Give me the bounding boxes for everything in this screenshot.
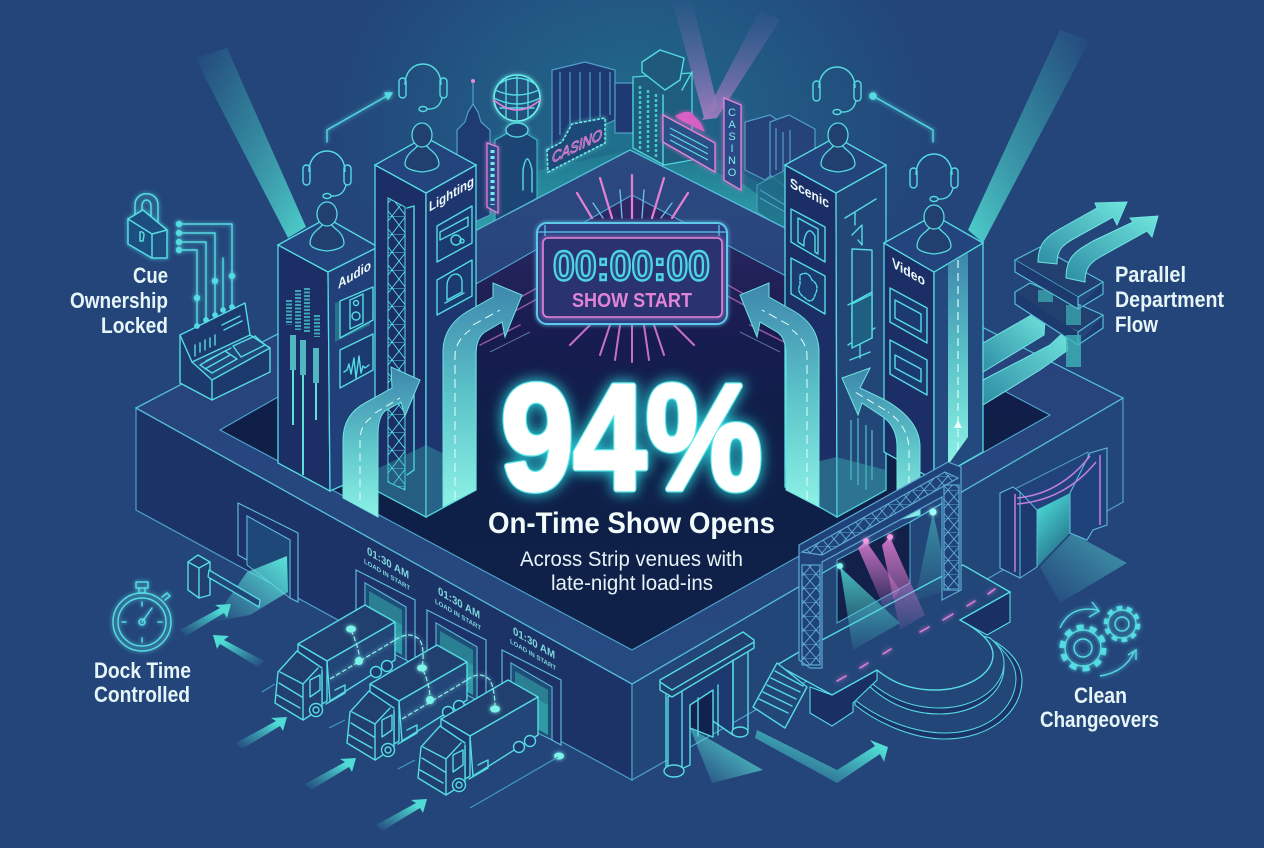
truck 1	[275, 605, 395, 720]
upright posts	[1038, 290, 1081, 367]
truck data links	[330, 626, 564, 760]
spotlight beams: pink	[672, 0, 780, 120]
dock time label 2: 01:30 AM	[438, 584, 480, 622]
vertical casino sign right: O	[728, 167, 737, 179]
vertical casino sign right: N	[728, 155, 736, 167]
description line 1: Across Strip venues with	[520, 548, 743, 571]
icon: set frame	[791, 209, 825, 262]
vertical sign left	[487, 143, 498, 213]
headline stat: 94%	[501, 353, 762, 521]
stage deck	[777, 565, 1010, 695]
light beam: cyan	[840, 567, 900, 650]
vertical casino sign right: A	[728, 119, 736, 131]
stage tier 1 top	[868, 630, 1004, 708]
stage lamps	[837, 508, 936, 569]
lower plate	[1015, 283, 1103, 345]
floor arrow 4	[305, 758, 356, 790]
label: dock time controlled	[94, 658, 191, 707]
dock time label 3: 01:30 AM	[513, 624, 555, 662]
arch wall inner	[1020, 492, 1037, 578]
icon: moving head	[437, 260, 472, 315]
floor guide lines	[262, 684, 558, 808]
label: clean changeovers	[1040, 683, 1159, 732]
central pit	[220, 195, 1050, 650]
label: cue ownership locked	[70, 263, 168, 338]
marquee sign	[663, 112, 715, 172]
arch left column	[1000, 487, 1020, 578]
person: video lead	[917, 205, 951, 254]
label: Video: Video	[892, 255, 925, 290]
dock time label 3: LOAD IN START	[510, 638, 557, 673]
subtitle: On-Time Show Opens	[488, 507, 775, 540]
dock time label 2: LOAD IN START	[435, 598, 482, 633]
flow arrow: big left	[443, 283, 522, 507]
show start label: SHOW START	[572, 290, 692, 312]
vertical casino sign right: C	[728, 107, 736, 119]
icon: speaker	[335, 287, 373, 342]
floor arrow 3	[236, 717, 287, 749]
connector: right headsets	[870, 93, 933, 142]
light beams: pink	[858, 537, 925, 630]
teal hotel	[633, 50, 692, 168]
platform	[136, 150, 1123, 780]
dock door 2	[427, 610, 486, 705]
skyline	[457, 50, 815, 280]
label: cue ownership locked: Ownership	[70, 288, 168, 313]
tower: video	[884, 205, 983, 480]
countdown digits: 00:00:00	[553, 242, 710, 289]
vertical casino sign right: I	[730, 143, 734, 155]
equaliser bars	[289, 288, 317, 337]
icon: lighting rig	[437, 206, 472, 262]
glass base	[375, 445, 476, 517]
arch opening	[1037, 493, 1070, 567]
label: Audio: Audio	[338, 257, 371, 293]
icon: gears	[1060, 602, 1138, 676]
label: clean changeovers: Clean	[1074, 683, 1127, 708]
person: scenic lead	[821, 123, 855, 172]
description line 2: late-night load-ins	[551, 572, 713, 595]
icon: scenic gear	[791, 258, 825, 314]
timer burst	[570, 175, 694, 362]
person: lighting lead	[405, 123, 439, 172]
rigging	[845, 199, 876, 360]
faders	[290, 335, 319, 475]
headline stat glow: 94%	[501, 353, 762, 521]
arch right column	[1070, 448, 1107, 540]
flow arrow: small left	[343, 367, 420, 517]
teal base lines	[477, 150, 630, 235]
icon: waveform	[340, 334, 373, 388]
right wall	[632, 398, 1123, 780]
upper flow arrow B	[1066, 216, 1158, 282]
headset icon 2	[399, 64, 447, 112]
video light strip	[948, 253, 968, 465]
label: parallel department flow: Department	[1115, 287, 1225, 312]
dock time label 1: 01:30 AM	[367, 544, 409, 582]
dock door 1	[356, 570, 415, 665]
stage side walls	[810, 670, 877, 726]
truck 3	[418, 680, 538, 795]
lower flow arrows	[983, 313, 1045, 372]
glass base	[785, 457, 886, 517]
upper flow arrow A	[1038, 202, 1127, 264]
deck dashes	[837, 589, 995, 681]
stage	[753, 462, 1022, 739]
casino sign left	[547, 118, 605, 172]
globe tower	[494, 75, 540, 222]
upper plate	[1015, 247, 1103, 309]
label: clean changeovers: Changeovers	[1040, 707, 1159, 732]
headline stat outline: 94%	[501, 353, 762, 521]
vertical casino sign right: S	[728, 131, 736, 143]
label: parallel department flow	[1115, 262, 1225, 337]
spotlight beam: right	[968, 30, 1090, 243]
stage tier 2	[855, 640, 1022, 739]
dark hotel	[552, 62, 633, 150]
stairs	[753, 663, 807, 728]
label: cue ownership locked: Cue	[133, 263, 168, 288]
person: audio lead	[310, 202, 344, 251]
label: dock time controlled: Dock Time	[94, 658, 191, 683]
right buildings	[745, 115, 815, 190]
icon: card	[890, 340, 927, 395]
spotlight beam: left	[195, 48, 306, 238]
tower: scenic	[785, 123, 886, 517]
label: Scenic: Scenic	[790, 175, 829, 212]
teal base lines right	[630, 150, 785, 230]
headset icon 4	[813, 67, 861, 114]
ring top	[136, 150, 1123, 684]
truck 2	[347, 645, 467, 760]
label: parallel department flow: Flow	[1115, 312, 1159, 337]
label: cue ownership locked: Locked	[101, 313, 168, 338]
tower: lighting	[375, 123, 476, 517]
cue console	[180, 303, 270, 400]
stage tier 2 top	[855, 640, 1016, 733]
countdown panel	[537, 223, 727, 324]
icon: monitor	[890, 288, 927, 343]
casino sign left: CASINO	[552, 127, 602, 167]
floor arrow L shape	[755, 730, 888, 783]
arch neon curve	[1015, 455, 1100, 572]
access gate	[188, 555, 260, 607]
stage tier 1	[868, 630, 1004, 714]
parallel flow assembly	[983, 202, 1158, 405]
left wall	[136, 408, 632, 780]
label: parallel department flow: Parallel	[1115, 262, 1186, 287]
wires to console	[176, 222, 234, 326]
headset icon 1	[303, 151, 351, 198]
vertical casino sign right	[724, 98, 741, 190]
pink perspective streaks	[480, 275, 790, 345]
flow arrow: big right	[740, 283, 819, 507]
flow arrow: small right	[842, 368, 920, 520]
floor arrow 1	[180, 604, 231, 636]
teal wash	[470, 110, 790, 280]
icon: stopwatch	[113, 582, 171, 651]
dock door 3	[502, 650, 561, 745]
stage archway right	[1000, 448, 1127, 603]
stage back screen	[837, 522, 910, 623]
dock time label 1: LOAD IN START	[364, 558, 411, 593]
lattice truss	[388, 198, 414, 490]
light beam: cyan right	[915, 512, 950, 600]
label: dock time controlled: Controlled	[94, 682, 190, 707]
floor arrow 5	[376, 799, 427, 831]
light risers	[851, 418, 872, 490]
label: Lighting: Lighting	[429, 173, 474, 216]
stage archway left	[660, 632, 763, 783]
tower: audio	[278, 202, 378, 491]
icon: padlock	[128, 194, 167, 258]
spire tower	[457, 79, 490, 230]
empty dock door	[212, 503, 298, 622]
floor arrow 2	[213, 635, 264, 667]
connector: left headsets	[327, 93, 392, 142]
headset icon 3	[910, 154, 958, 202]
arch soffit	[1013, 452, 1090, 515]
truss frame	[799, 462, 961, 668]
